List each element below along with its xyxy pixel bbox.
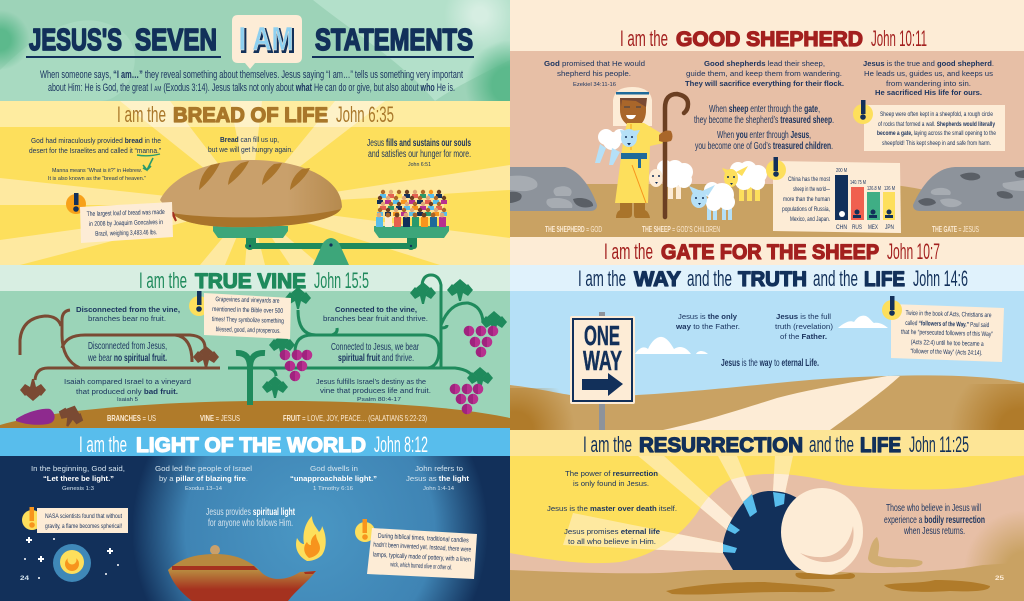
heading: bread of life: [117, 102, 394, 127]
callout: NASA: [22, 507, 128, 533]
icon: loaf of bread: [160, 160, 342, 227]
ground: [510, 563, 1024, 601]
callout: followers of the way: (Acts 22:4) until he too became a: [911, 339, 984, 348]
icon: oil lamp: [168, 516, 326, 601]
text: bodily resurrection: when Jesus returns.: [903, 526, 965, 537]
text: only way: Jesus is the only: [678, 312, 738, 321]
callout: NASA: NASA scientists found that without: [45, 513, 122, 520]
icon: spherical flame and stars: [24, 537, 119, 582]
text: bodily resurrection: Those who believe in Jesus will: [886, 503, 981, 514]
callout: China sheep chart: [766, 157, 901, 233]
text: John refers: [406, 464, 469, 492]
bar chart: JPN: [885, 224, 894, 231]
legend: branches vine fruit: FRUIT = LOVE, JOY, PEACE… (GALATIANS 5:22-23): [283, 414, 427, 423]
icon: sheep blue: [689, 182, 735, 220]
heading: true vine: [139, 268, 369, 293]
icon: rolled stone: [781, 488, 863, 576]
panel: introduction header: [0, 0, 510, 101]
panel: true vine: [0, 265, 510, 431]
legend: shepherd sheep gate: THE GATE = JESUS: [932, 225, 979, 234]
intro text: [40, 69, 463, 94]
heading: way truth life: and the: [813, 266, 858, 291]
text: eternal life: to all who believe in Him.: [568, 537, 656, 546]
text: eternal life: Jesus promises eternal life: [564, 527, 660, 536]
text: God promised: shepherd his people.: [557, 69, 631, 78]
heading: resurrection and the life: John 11:25: [909, 432, 969, 457]
text: only way: way to the Father.: [675, 322, 740, 331]
callout: followers of the way: Twice in the book of Acts, Christians are: [905, 310, 992, 319]
legend: shepherd sheep gate: THE SHEPHERD = GOD: [545, 225, 602, 234]
text: manna: desert for the Israelites and called it “manna.”: [29, 146, 161, 155]
text: eternal life: [564, 527, 660, 546]
text: God promised: [544, 59, 645, 88]
legend: branches vine fruit: VINE = JESUS: [200, 414, 240, 423]
icon: one way sign: ONE: [584, 320, 620, 351]
bar chart: 200 M: [836, 168, 847, 174]
text: full truth: truth (revelation): [775, 322, 833, 331]
title: Jesus's Seven: JESUS'S: [29, 22, 122, 57]
disconnected branches: [16, 310, 220, 431]
title: Statements: STATEMENTS: [315, 22, 473, 57]
page number 24: 24: [20, 575, 29, 582]
icon: empty tomb: [723, 491, 815, 570]
heading: gate for the sheep: GATE FOR THE SHEEP: [661, 241, 879, 264]
text: let there be light: In the beginning, God said,: [31, 464, 125, 473]
text: connected to Jesus: [331, 342, 419, 364]
icon: shepherd: [613, 87, 688, 218]
text: connected to Jesus: Connected to Jesus, we bear: [331, 342, 419, 353]
text: manna: Manna means “What is it?” in Hebrew.: [52, 168, 142, 174]
heading: true vine: John 15:5: [314, 268, 369, 293]
title: Jesus's Seven: [26, 22, 221, 58]
heading: bread of life: I am the: [117, 102, 166, 127]
text: sheep and gate: When sheep enter through the gate,: [709, 104, 820, 115]
intro text: When someone says, “I am…” they reveal something about themselves. Jesus saying “I am…” tells us something very important: [40, 69, 463, 81]
callout: sheepfold: become a gate, laying across the small opening to the: [877, 130, 996, 137]
pink hillside: [510, 474, 1024, 601]
text: Jesus true shepherd: He sacrificed His life for ours.: [875, 88, 982, 97]
page number 25: 25: [995, 575, 1004, 582]
icon: sheep yellow: [722, 161, 767, 201]
heading: resurrection and the life: LIFE: [860, 434, 901, 457]
text: unapproachable light: “unapproachable light.”: [290, 474, 377, 483]
text: fills and sustains: and satisfies our hunger for more.: [368, 149, 471, 160]
icon: sheep white: [649, 160, 693, 199]
heading: true vine: I am the: [139, 268, 187, 293]
legend: shepherd sheep gate: THE SHEEP = GOD’S CHILDREN: [642, 225, 720, 234]
panel: gate for the sheep: [510, 237, 1024, 265]
callout: biblical lamps: During biblical times, traditional candles: [378, 533, 469, 544]
note text: [782, 176, 830, 223]
callout: grapevines: Grapevines and vineyards are: [215, 296, 280, 305]
text: John refers: John 1:4-14: [423, 486, 454, 492]
icon: left rocks: [510, 167, 597, 211]
bar chart: 126 M: [884, 186, 895, 192]
note text: more than the human: [783, 196, 830, 203]
icon: lamb on shoulders: [595, 129, 640, 165]
note text: populations of Russia,: [782, 206, 830, 213]
text: sheep and gate: they become the shepherd’s treasured sheep.: [694, 115, 834, 126]
callout: biblical lamps: lamps, typically made of pottery, with a linen: [373, 551, 471, 564]
text: fills and sustains: John 6:51: [408, 162, 431, 168]
text: unapproachable light: [290, 464, 377, 492]
ground shadows: [666, 573, 990, 595]
text: manna: It is also known as the “bread of heaven.”: [48, 176, 146, 182]
bar chart: [835, 168, 895, 231]
heading: bread of life: BREAD OF LIFE: [173, 104, 328, 127]
sun rays: [0, 101, 510, 265]
text: spiritual light: [206, 507, 295, 529]
text: full truth: of the Father.: [780, 332, 827, 341]
text: pillar of fire: God led the people of Israel: [155, 464, 252, 473]
legend: branches vine fruit: BRANCHES = US: [107, 414, 156, 423]
text: full truth: [775, 312, 833, 341]
text: pillar of fire: by a pillar of blazing fire.: [159, 474, 248, 483]
text: bodily resurrection: experience a bodily resurrection: [884, 515, 985, 526]
text: Isaiah: that produced only bad fruit.: [76, 387, 178, 396]
bar chart: 126.8 M: [867, 186, 881, 192]
scale: [213, 226, 449, 265]
heading: true vine: TRUE VINE: [195, 270, 306, 293]
speech bubble: I AM: I AM: [238, 20, 294, 57]
text: disconnected from Jesus: Disconnected from Jesus,: [88, 341, 167, 352]
text: disconnected from the vine: Disconnected from the vine,: [76, 305, 180, 314]
heading: good shepherd: John 10:11: [871, 26, 927, 51]
text: bread can fill: [208, 135, 293, 154]
text: Jesus true shepherd: from wandering into sin.: [886, 79, 971, 88]
heading: gate for the sheep: John 10:7: [887, 239, 940, 264]
text: spiritual light: for anyone who follows Him.: [208, 518, 293, 529]
bar chart: MEX: [868, 224, 878, 231]
text: way to eternal life: Jesus is the way to eternal Life.: [721, 358, 819, 369]
light rays: [563, 455, 793, 553]
heading: way truth life: I am the: [578, 266, 626, 291]
panel: good shepherd: [510, 0, 1024, 237]
panel: light of the world: [0, 430, 510, 601]
soil: [0, 401, 510, 430]
text: good shepherds lead: guide them, and keep them from wandering.: [686, 69, 842, 78]
text: disconnected from the vine: branches bear no fruit.: [88, 314, 166, 323]
bar chart: 140.75 M: [850, 180, 866, 186]
callout: grapevines: [189, 291, 291, 339]
text: good shepherds lead: Good shepherds lead their sheep,: [704, 59, 825, 68]
text: Jesus fulfills: Jesus fulfills Israel’s destiny as the: [316, 377, 426, 386]
bar chart: CHN: [836, 224, 847, 231]
text: power of resurrection: is only found in Jesus.: [573, 479, 649, 488]
heading: good shepherd: GOOD SHEPHERD: [676, 28, 863, 51]
text: fills and sustains: Jesus fills and sustains our souls: [367, 138, 471, 149]
callout: followers of the way: [882, 296, 1004, 362]
heading: gate for the sheep: [604, 239, 940, 264]
icon: crowd of people: [376, 190, 447, 227]
text: master over death: Jesus is the master over death itself.: [547, 504, 677, 513]
heading: way truth life: WAY: [634, 268, 681, 291]
note text: China has the most: [788, 176, 830, 183]
text: bread can fill: but we will get hungry again.: [208, 145, 293, 154]
note text: Mexico, and Japan.: [790, 216, 830, 223]
text: Jesus fulfills: Psalm 80:4-17: [357, 397, 401, 403]
text: sheep and gate: you become one of God’s treasured children.: [695, 141, 833, 152]
callout: biblical lamps: [355, 519, 477, 579]
panel: resurrection and the life: [510, 430, 1024, 601]
text: manna: [29, 136, 161, 182]
intro text: about Him: He is God, the great I AM (Exodus 3:14). Jesus talks not only about what He can do or give, but also about who He is.: [48, 82, 455, 94]
text: sheep and gate: [694, 104, 834, 152]
callout: largest loaf: The largest loaf of bread was made: [87, 209, 165, 218]
speech bubble: I AM: [232, 15, 302, 69]
heading: way truth life: and the: [687, 266, 732, 291]
text: good shepherds lead: [685, 59, 844, 88]
heading: way truth life: John 14:6: [913, 266, 968, 291]
heading: bread of life: John 6:35: [336, 102, 394, 127]
text: Jesus true shepherd: Jesus is the true and good shepherd.: [863, 59, 994, 68]
text: connected to Jesus: spiritual fruit and thrive.: [338, 353, 414, 364]
text: John refers: Jesus as the light: [406, 474, 469, 483]
panel: bread of life: [0, 101, 510, 265]
callout: grapevines: times! They symbolize something: [212, 316, 284, 325]
heading: good shepherd: [620, 26, 927, 51]
note text: sheep in the world—: [793, 186, 830, 193]
callout: followers of the way: that he “persecuted followers of this Way”: [901, 329, 993, 338]
text: spiritual light: Jesus provides spiritual light: [206, 507, 295, 518]
callout: largest loaf: Brazil, weighing 3,483.46 lbs.: [95, 229, 157, 238]
bar chart: RUS: [852, 224, 862, 231]
text: Isaiah: [64, 377, 191, 403]
text: full truth: Jesus is the full: [776, 312, 831, 321]
text: Isaiah: Isaiah 5: [117, 397, 138, 403]
text: God promised: God promised that He would: [544, 59, 645, 68]
text: good shepherds lead: They will sacrifice everything for their flock.: [685, 79, 844, 88]
clouds: [635, 316, 888, 354]
text: manna: God had miraculously provided bread in the: [31, 136, 161, 145]
callout: largest loaf: [66, 193, 173, 243]
heading: resurrection and the life: RESURRECTION: [639, 434, 803, 457]
heading: resurrection and the life: I am the: [583, 432, 632, 457]
callout: sheepfold: [853, 100, 1005, 151]
heading: light of the world: [79, 432, 428, 457]
text: power of resurrection: The power of resurrection: [565, 469, 658, 478]
text: disconnected from the vine: [76, 305, 180, 323]
heading: way truth life: TRUTH: [738, 268, 807, 291]
text: let there be light: “Let there be light.”: [43, 474, 114, 483]
callout: sheepfold: of rocks that formed a wall. Shepherds would literally: [878, 121, 995, 128]
panel: way truth life: [510, 265, 1024, 430]
callout: grapevines: blessed, good, and prosperous.: [216, 326, 281, 335]
icon: one way sign: WAY: [583, 345, 622, 376]
text: only way: [675, 312, 740, 331]
heading: resurrection and the life: and the: [809, 432, 854, 457]
connected vine: [228, 275, 507, 405]
text: pillar of fire: Exodus 13–14: [185, 486, 222, 492]
heading: light of the world: John 8:12: [374, 432, 428, 457]
legend: branches vine fruit: [107, 414, 427, 423]
callout: largest loaf: in 2008 by Joaquim Goncalves in: [89, 219, 163, 228]
heading: gate for the sheep: I am the: [604, 239, 653, 264]
icon: right rocks: [913, 167, 1024, 211]
text: pillar of fire: [155, 464, 252, 492]
text: bread can fill: Bread can fill us up,: [220, 135, 279, 144]
text: Jesus fulfills: [316, 377, 431, 403]
text: let there be light: Genesis 1:3: [62, 486, 94, 492]
text: Jesus true shepherd: [863, 59, 994, 97]
text: connected to the vine: branches bear fruit and thrive.: [323, 314, 428, 323]
text: connected to the vine: [323, 305, 428, 323]
heading: good shepherd: I am the: [620, 26, 668, 51]
text: disconnected from Jesus: [87, 341, 167, 364]
road and hills: [510, 375, 1024, 430]
callout: biblical lamps: hadn’t been invented yet. Instead, there were: [373, 541, 472, 554]
grapes: [280, 326, 498, 414]
text: disconnected from Jesus: we bear no spiritual fruit.: [87, 353, 167, 364]
callout: NASA: gravity, a flame becomes spherical!: [45, 523, 122, 530]
heading: way truth life: [578, 266, 968, 291]
text: fills and sustains: [367, 138, 471, 168]
text: connected to the vine: Connected to the vine,: [335, 305, 417, 314]
heading: way truth life: LIFE: [864, 268, 905, 291]
ground crack: [868, 537, 923, 567]
text: sheep and gate: When you enter through Jesus,: [717, 130, 811, 141]
callout: followers of the way: “follower of the Way” (Acts 24:14).: [910, 348, 983, 357]
callout: biblical lamps: wick, which burned olive or other oil.: [390, 561, 453, 572]
speech bubble: I AM: I AM: [240, 22, 295, 59]
text: power of resurrection: [565, 469, 658, 488]
callout: grapevines: mentioned in the Bible over 500: [212, 306, 283, 315]
heading: light of the world: LIGHT OF THE WORLD: [136, 434, 366, 457]
text: God promised: Ezekiel 34:11-16: [573, 82, 616, 88]
title: Jesus's Seven: SEVEN: [135, 22, 217, 57]
heading: resurrection and the life: [583, 432, 969, 457]
text: unapproachable light: God dwells in: [310, 464, 358, 473]
text: John refers: John refers to: [415, 464, 463, 473]
legend: shepherd sheep gate: [545, 225, 979, 234]
text: let there be light: [31, 464, 125, 492]
text: bodily resurrection: [884, 503, 985, 537]
text: Jesus fulfills: vine that produces life and fruit.: [320, 386, 431, 395]
icon: one way sign: [570, 312, 635, 430]
heading: light of the world: I am the: [79, 432, 127, 457]
text: unapproachable light: 1 Timothy 6:16: [313, 486, 353, 492]
text: Jesus true shepherd: He leads us, guides us, and keeps us: [864, 69, 993, 78]
text: Isaiah: Isaiah compared Israel to a vineyard: [64, 377, 191, 386]
callout: followers of the way: called “followers of the Way.” Paul said: [905, 320, 990, 329]
